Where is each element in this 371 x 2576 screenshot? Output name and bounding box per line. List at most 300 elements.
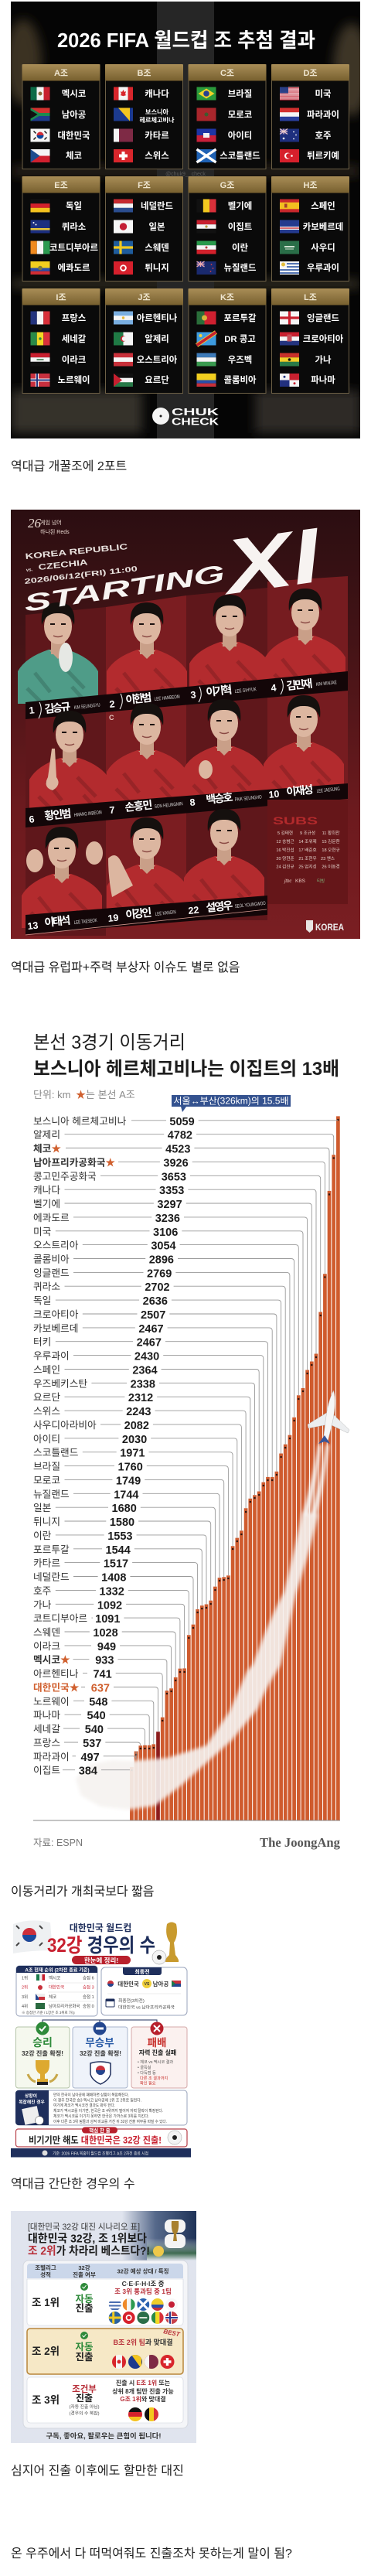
panel: group A: A조 — [54, 68, 68, 78]
country names: 가나 — [33, 1599, 52, 1610]
row: group 3rd: G조 1위와 맞대결 — [120, 2395, 166, 2403]
row: group 2nd highlighted: 진출 — [75, 2352, 94, 2363]
panel: group C: 아이티 — [228, 131, 252, 141]
country names: 아이티 — [33, 1434, 60, 1445]
chart baseline — [33, 1820, 340, 1821]
flag: Czechia — [31, 149, 49, 162]
flag: USA — [280, 87, 299, 101]
bar top markers — [131, 1120, 339, 1770]
name strip row 3: LEE KANGIN — [155, 909, 176, 917]
name strip row 3: 이강인 — [125, 906, 152, 921]
row: group 3rd: 진출 시 E조 1위 또는 — [116, 2379, 171, 2387]
panel: substitutes: 20 양현준 — [276, 855, 294, 862]
country names: 카타르 — [33, 1558, 60, 1569]
country names: 호주 — [33, 1585, 51, 1596]
panel: group E: 코트디부아르 — [49, 243, 98, 253]
panel: group D: 튀르키예 — [307, 150, 339, 161]
publisher logo: The JoongAng — [260, 1835, 341, 1850]
flag: Saudi Arabia — [280, 241, 299, 254]
distance values: 741 — [93, 1669, 112, 1681]
name strip row 1: 김승규 — [44, 701, 71, 715]
logo: CHUK CHECK — [152, 407, 219, 427]
flag: Iraq — [31, 353, 49, 367]
contrail — [76, 1445, 329, 1810]
row: group 2nd highlighted: BEST — [163, 2328, 181, 2339]
panel: group K: 포르투갈 — [224, 313, 257, 323]
panel: group D: 미국 — [315, 89, 332, 99]
panel: group L: 파나마 — [311, 374, 335, 385]
name strip row 2: 이재성 — [286, 783, 314, 798]
panel: complicated case — [15, 2090, 187, 2125]
name strip row 2: 6 — [29, 814, 35, 825]
flag: South Africa — [31, 108, 49, 121]
heading: [대한민국 32강 대진 시나리오 표] — [28, 2222, 140, 2232]
match info text: CZECHIA — [38, 558, 89, 572]
panel: group F: 스웨덴 — [145, 243, 169, 253]
country names: 이란 — [33, 1530, 52, 1541]
flag: Algeria — [114, 333, 133, 345]
table header: 32강 예상 상대 / 특징 — [117, 2267, 169, 2275]
table header: 32강 — [78, 2264, 90, 2271]
icon: Korean flag — [13, 1920, 53, 1953]
panel: substitutes: 25 엄지성 — [298, 863, 317, 869]
panel: group E — [22, 176, 100, 281]
panel: loss: • 체코 vs 멕시코 결과 — [138, 2059, 173, 2065]
panel: group C — [189, 64, 266, 169]
distance values: 384 — [79, 1766, 97, 1778]
heading: STARTING XI — [22, 511, 328, 617]
panel: group G: 이란 — [232, 243, 248, 253]
country names: 남아프리카공화국★ — [33, 1157, 115, 1168]
table: group A standings: 대한민국 — [49, 1984, 64, 1991]
panel: substitutes: SUBS — [273, 814, 318, 827]
panel: substitutes: 26 이동경 — [322, 863, 340, 869]
leader lines — [56, 1121, 166, 1770]
panel: substitutes: 티빙 — [317, 878, 325, 884]
country names: 스웨덴 — [33, 1627, 60, 1638]
panel: group A: 남아공 — [62, 110, 86, 120]
name strip row 1: LEE GIHYUK — [234, 687, 257, 694]
country names: 파라과이 — [33, 1752, 70, 1762]
panel: group J: 오스트리아 — [137, 355, 178, 365]
flag: Senegal — [31, 333, 49, 345]
panel: group F: F조 — [138, 180, 151, 190]
panel: group K: 우즈벡 — [228, 354, 252, 365]
legend star note: ★는 본선 A조 — [76, 1089, 135, 1100]
flag: Scotland — [196, 149, 216, 162]
table: group A standings — [16, 1966, 97, 2016]
country names: 미국 — [33, 1227, 52, 1237]
panel: group B: 헤르체고비나 — [139, 116, 175, 124]
panel: group J: 요르단 — [145, 375, 169, 385]
flag: Curacao — [31, 220, 49, 234]
flag: Morocco — [196, 108, 216, 121]
match info text: KOREA REPUBLIC — [25, 542, 128, 561]
panel: key line: 비기기만 해도 대한민국은 32강 진출! — [29, 2134, 162, 2145]
heading: 대한민국 32강, 조 1위보다 — [28, 2232, 148, 2246]
panel: group I: 이라크 — [62, 355, 87, 365]
name strip row 1: 4 — [271, 682, 277, 694]
panel: group E: 퀴라소 — [62, 222, 87, 232]
name strip row 1: 1 — [29, 705, 35, 716]
panel: loss: 자력 진출 실패 — [139, 2049, 176, 2056]
panel: group C: C조 — [220, 68, 234, 78]
distance values: 1332 — [100, 1585, 124, 1598]
icon: trophy and ball — [152, 1923, 179, 1964]
panel: win — [15, 2022, 70, 2088]
row: group 1st: 자동 — [75, 2294, 94, 2305]
panel: final match: 대한민국 — [117, 1980, 139, 1987]
distance values: 1544 — [106, 1544, 131, 1557]
flag: Canada — [114, 87, 133, 101]
name strip row 2: PAIK SEUNGHO — [234, 794, 262, 803]
match info text: vs. — [26, 568, 33, 573]
flag circles: group B — [112, 2355, 175, 2369]
table: group A standings: 체코 — [49, 1994, 56, 2000]
icon: airplane — [308, 1390, 349, 1444]
distance values: 933 — [95, 1655, 114, 1667]
flag: Ecuador — [31, 261, 49, 275]
country names: 요르단 — [33, 1392, 60, 1403]
flag: Portugal — [196, 311, 216, 325]
heading: 32강 경우의 수 — [47, 1935, 155, 1957]
flag: Qatar — [114, 128, 133, 142]
logo: CHUK CHECK: CHUK — [172, 407, 219, 418]
panel: group H — [271, 176, 349, 281]
name strip row 3: LEE TAESEOK — [73, 918, 97, 926]
panel: substitutes: 15 김문환 — [322, 838, 340, 844]
country names: 캐나다 — [33, 1185, 60, 1196]
panel: substitutes: 14 조위제 — [298, 838, 317, 844]
panel: draw: 32강 진출 확정! — [80, 2049, 121, 2057]
country names: 뉴질랜드 — [33, 1489, 70, 1500]
distance values: 540 — [85, 1724, 104, 1736]
panel: final match — [101, 1967, 187, 2015]
connector lines — [43, 2020, 157, 2025]
watermark: @chuk9__check — [165, 172, 206, 177]
country names: 콩고민주공화국 — [33, 1171, 97, 1182]
distance values: 2702 — [145, 1281, 170, 1294]
country names: 일본 — [33, 1503, 51, 1513]
panel: loss: • 다득점 등 — [138, 2069, 156, 2076]
name strip row 1: 이한범 — [125, 691, 152, 706]
distance values: 2636 — [143, 1295, 168, 1308]
heading: 조 2위가 차라리 베스트다?! — [28, 2244, 150, 2258]
panel: group C: 스코틀랜드 — [220, 151, 260, 161]
chart title — [33, 1032, 339, 1080]
panel: loss — [131, 2022, 187, 2088]
distance values: 3297 — [157, 1199, 182, 1211]
panel: group A: 대한민국 — [58, 130, 90, 141]
panel: final match: 대한민국 vs 남아프리카공화국 — [118, 2005, 175, 2011]
flag: Netherlands — [114, 200, 133, 212]
panel: loss: 확인 필요 — [140, 2080, 156, 2086]
country names: 사우디아라비아 — [33, 1420, 97, 1431]
country names: 독일 — [33, 1295, 51, 1306]
distance values: 3353 — [159, 1185, 184, 1197]
panel: group G: 벨기에 — [228, 200, 252, 211]
row: group 3rd: (경우의 수 복잡) — [69, 2410, 100, 2416]
name strip row 1 — [26, 671, 348, 719]
distance values: 1028 — [93, 1627, 118, 1639]
name strip row 2: 백승호 — [206, 790, 233, 806]
row: group 2nd highlighted: 자동 — [75, 2342, 94, 2353]
flag: Brazil — [196, 87, 216, 101]
heading: STARTING XI: STARTING — [22, 560, 226, 617]
flag: Switzerland — [114, 149, 133, 162]
name strip row 2: HWANG INBEOM — [73, 810, 102, 818]
panel: group C: 브라질 — [228, 89, 252, 99]
panel: 2026 FIFA World Cup draw result graphic — [11, 2, 360, 438]
distance values: 2364 — [132, 1364, 158, 1377]
flag: Belgium — [196, 200, 216, 212]
flag: DR Congo — [196, 333, 216, 345]
name strip row 1: 김민재 — [286, 677, 313, 692]
country names: 스위스 — [33, 1406, 60, 1417]
panel: group L: L조 — [304, 292, 317, 302]
distance values: 3926 — [163, 1157, 189, 1169]
distance values: 1749 — [116, 1475, 141, 1487]
table: group A standings: 멕시코 — [49, 1975, 60, 1981]
distance values: 540 — [87, 1710, 106, 1722]
callout: Seoul-Busan comparison — [172, 1095, 291, 1112]
country names: 모로코 — [33, 1475, 60, 1486]
panel: key line — [15, 2127, 187, 2147]
panel: group I — [22, 288, 100, 393]
panel: group L: 가나 — [315, 354, 332, 365]
panel: group E: 에콰도르 — [58, 263, 90, 273]
name strip row 3: 19 — [107, 913, 119, 924]
table header: 조별리그 — [35, 2264, 56, 2271]
panel: substitutes: 18 오현규 — [322, 847, 340, 853]
panel: win: 32강 진출 확정! — [22, 2049, 63, 2057]
distance values: 637 — [91, 1683, 110, 1695]
panel: substitutes: 21 조현우 — [298, 855, 317, 862]
distance values: 497 — [80, 1752, 100, 1764]
panel: substitutes: 5 김태현 — [277, 830, 293, 836]
row: group 3rd: 조건부 — [72, 2383, 97, 2394]
country names: 코트디부아르 — [33, 1613, 87, 1624]
flag: Sweden — [114, 241, 133, 254]
flag: Norway — [31, 374, 49, 387]
row: group 3rd: 조 3위 — [32, 2394, 60, 2406]
name strip row 2: 황인범 — [44, 807, 72, 822]
country names: 이집트 — [33, 1766, 60, 1776]
logo: Reds slogan — [28, 516, 70, 535]
name strip row 3: SEOL YOUNGWOO — [234, 901, 266, 909]
country names: 오스트리아 — [33, 1240, 79, 1251]
distance values: 1971 — [120, 1448, 145, 1460]
country names: 멕시코★ — [33, 1655, 70, 1666]
logo: Reds slogan: 하나된 Reds — [40, 528, 70, 535]
logo: Reds slogan: 게임 넘어 — [40, 519, 62, 526]
table: group A standings: 승점 1 — [83, 1994, 94, 2000]
country names: 노르웨이 — [33, 1696, 70, 1707]
flag circles: Germany and Belgium — [128, 2407, 158, 2421]
country names: 콜롬비아 — [33, 1254, 70, 1265]
panel: group J — [105, 288, 183, 393]
table: group A standings: A조 현재 순위 (2차전 종료 기준) — [25, 1967, 90, 1974]
distance values: 2769 — [147, 1268, 172, 1280]
country names — [33, 1116, 127, 1776]
logo: KOREA: KOREA — [315, 922, 344, 933]
flag: Panama — [280, 374, 299, 387]
caption 2: 역대급 유럽파+주력 부상자 이슈도 별로 없음 — [11, 961, 240, 974]
country names: 카보베르데 — [33, 1323, 78, 1334]
panel: final match: 남아공 — [153, 1980, 168, 1987]
icon: trophy emblem — [165, 2219, 186, 2248]
name strip row 1: 2 — [109, 698, 115, 710]
table: group A standings: 1위 — [22, 1975, 28, 1981]
logo: Reds slogan: 26 — [28, 516, 42, 531]
row: group 1st: 조 3위 통과팀 중 1팀 — [114, 2288, 172, 2295]
distance values: 4782 — [168, 1130, 192, 1142]
panel: Korea vs Czechia starting XI poster — [11, 510, 360, 939]
panel: group F — [105, 176, 183, 281]
row: group 3rd: 진출 — [76, 2393, 93, 2404]
panel: group F: 일본 — [149, 221, 165, 232]
footer note: 구독, 좋아요, 팔로우는 큰힘이 됩니다! — [46, 2431, 162, 2440]
panel: group G — [189, 176, 266, 281]
heading: 대한민국 월드컵 — [70, 1922, 131, 1933]
name strip row 2: LEE JAESUNG — [316, 786, 340, 794]
table: group A standings: 승점 0 — [83, 2004, 94, 2009]
name strip row 1: LEE HANBEOM — [154, 694, 180, 702]
country names: 프랑스 — [33, 1738, 60, 1749]
title: 2026 FIFA 월드컵 조 추첨 결과 — [57, 29, 315, 52]
chart title: 본선 3경기 이동거리 — [33, 1032, 186, 1053]
row: group 2nd highlighted: B조 2위 팀과 맞대결 — [114, 2338, 172, 2346]
row: group 3rd: (자동 진출 아님) — [69, 2404, 100, 2410]
distance values: 537 — [83, 1738, 101, 1750]
distance values: 2507 — [141, 1309, 165, 1322]
panel: final match: VS — [145, 1982, 150, 1987]
panel: group K: 콜롬비아 — [224, 375, 257, 385]
flag: Argentina — [114, 311, 133, 325]
country names: 파나마 — [33, 1710, 60, 1721]
row: group 1st: C·E·F·H·I조 중 — [122, 2280, 165, 2288]
panel: travel distance bar chart — [33, 1032, 349, 1850]
country names: 스페인 — [33, 1364, 60, 1375]
panel: group K: DR 콩고 — [224, 334, 256, 344]
panel: group K: K조 — [220, 292, 234, 302]
panel: group I: I조 — [56, 292, 66, 302]
distance values: 1580 — [110, 1517, 134, 1529]
flag: Mexico — [31, 87, 49, 101]
country names: 세네갈 — [33, 1724, 60, 1735]
flag: Tunisia — [114, 261, 133, 275]
country names: 대한민국★ — [33, 1683, 80, 1694]
panel: group D: 파라과이 — [307, 109, 339, 120]
table — [23, 2260, 188, 2428]
flag: Bosnia — [114, 108, 133, 121]
country names: 터키 — [33, 1337, 51, 1348]
row: group 1st — [27, 2279, 183, 2325]
panel: group L — [271, 288, 349, 393]
name strip row 1: 이기혁 — [206, 684, 233, 698]
panel: complicated case: 이후 다른 조 3위 팀들과 성적 비교를 거친 뒤 32강 진출 여부를 따질 수 있다. — [53, 2119, 167, 2124]
panel: group H: H조 — [303, 180, 318, 190]
logo: KOREA — [306, 920, 344, 933]
distance values — [79, 1116, 195, 1778]
panel: group J: 알제리 — [145, 333, 169, 344]
country names: 우루과이 — [33, 1351, 70, 1362]
distance values: 949 — [97, 1641, 116, 1653]
flag: Japan — [114, 220, 133, 234]
panel: group B: 스위스 — [145, 151, 169, 161]
distance values: 1744 — [114, 1489, 139, 1501]
row: group 1st: 진출 — [75, 2303, 94, 2314]
distance values: 2467 — [138, 1323, 164, 1336]
panel: group H: 카보베르데 — [303, 221, 343, 232]
match info text: 2026/06/12(FRI) 11:00 — [24, 565, 138, 586]
name strip row 2: 7 — [109, 804, 115, 816]
panel: group D: D조 — [303, 68, 318, 78]
flag: Haiti — [196, 128, 216, 142]
row: group 3rd — [27, 2377, 183, 2423]
distance values: 2082 — [124, 1420, 149, 1432]
flag: Austria — [114, 353, 133, 367]
name strip row 3: 22 — [188, 905, 199, 916]
country names: 보스니아 헤르체고비나 — [33, 1116, 127, 1127]
flag: Ivory Coast — [31, 241, 49, 254]
panel: substitutes: 24 김진규 — [276, 863, 294, 869]
bars — [131, 1116, 338, 1820]
panel: group F: 튀니지 — [145, 263, 169, 273]
row: group 2nd highlighted: 조 2위 — [32, 2346, 60, 2357]
panel: group B: 카타르 — [145, 130, 169, 141]
panel: loss: • 골득실 — [138, 2064, 151, 2070]
panel: complicated case: 여기에 체코가 멕시코전 결과도 봐야 한다. — [53, 2103, 115, 2108]
name strip row 2: 손흥민 — [124, 798, 153, 814]
panel: group F: 네덜란드 — [141, 200, 173, 211]
distance values: 1092 — [97, 1599, 122, 1612]
panel: final match: 최종전 — [134, 1968, 150, 1975]
panel: group G: 뉴질랜드 — [224, 263, 257, 273]
table: group A standings: 승점 6 — [83, 1975, 94, 1981]
country names: 튀니지 — [33, 1517, 60, 1527]
panel: group E: 독일 — [66, 200, 82, 211]
flag: New Zealand — [196, 261, 216, 275]
country names: 우즈베키스탄 — [33, 1378, 87, 1389]
distance values: 1408 — [101, 1571, 126, 1584]
pill: at a glance: 한눈에 정리! — [84, 1957, 118, 1964]
name strip row 2: 10 — [268, 789, 280, 800]
players row 3 — [22, 809, 264, 928]
chart title: 보스니아 헤르체고비나는 이집트의 13배 — [33, 1059, 339, 1080]
flag circles: third-place candidates — [109, 2298, 178, 2324]
panel: group I: 세네갈 — [62, 334, 87, 344]
red panel columns — [26, 576, 348, 936]
distance values: 3236 — [155, 1213, 180, 1225]
panel: substitutes: 12 송범근 — [276, 838, 294, 844]
country names: 잉글랜드 — [33, 1268, 70, 1278]
distance values: 2430 — [134, 1351, 159, 1363]
flag: Cape Verde — [280, 220, 299, 234]
name strip row 3: 설영우 — [206, 899, 233, 914]
panel: complicated case: 복잡해진 경우 — [19, 2099, 45, 2105]
panel: group B: 보스니아 — [145, 108, 169, 116]
panel: group G: G조 — [220, 180, 234, 190]
distance values: 1091 — [95, 1613, 120, 1626]
caption 1: 역대급 개꿀조에 2포트 — [11, 460, 127, 473]
country names: 포르투갈 — [33, 1544, 70, 1555]
country names: 네덜란드 — [33, 1571, 70, 1582]
players row 1 — [18, 589, 345, 704]
name strip row 3: 이태석 — [44, 914, 71, 929]
flag: Iran — [196, 241, 216, 254]
panel: group B — [105, 64, 183, 169]
